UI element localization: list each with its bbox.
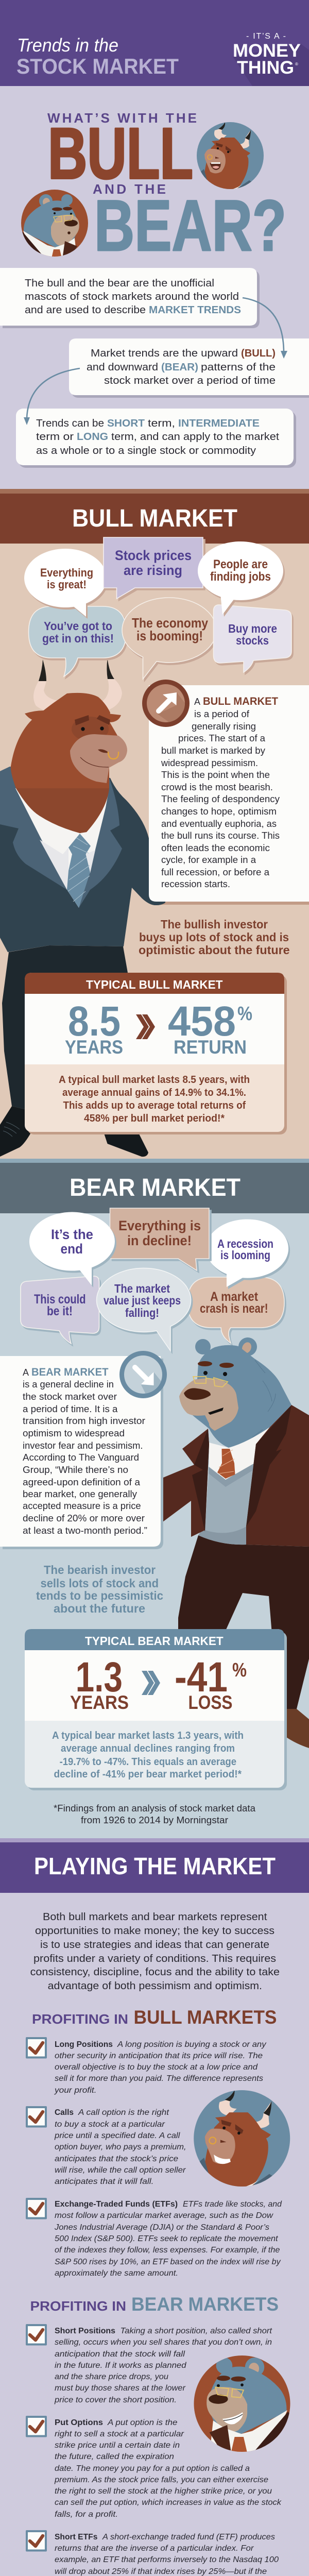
strategy: short positions: selling, occurs when you sell shares that you don’t own, in — [55, 2338, 272, 2347]
stat: 458 percent return: RETURN — [174, 1037, 247, 1058]
strategy: put options: the future, called the expiration — [55, 2452, 174, 2461]
text panel: bull market definition: prices. The start of a — [178, 733, 266, 743]
speech bubble: the economy is booming: The economy — [132, 615, 208, 631]
text panel: bear market definition: transition from high investor — [23, 1416, 145, 1426]
speech bubble: the economy is booming: is booming! — [136, 628, 203, 643]
strategy: put options: Put Options — [55, 2418, 103, 2427]
heading: profiting in bull markets: PROFITING IN — [32, 2011, 128, 2027]
speech bubble: it's the end: It’s the — [51, 1227, 93, 1242]
text panel: bull market definition: BULL MARKET — [203, 696, 278, 707]
strategy: put options: falls, for a profit. — [55, 2510, 118, 2519]
text box: market trends definition: stock market over a period of time — [104, 375, 276, 386]
bull market heading band: BULL MARKET — [72, 505, 237, 532]
strategy: calls: to buy a stock at a particular — [55, 2120, 165, 2129]
speech bubble: the economy is booming — [122, 598, 216, 679]
icon: checkbox short etfs — [26, 2530, 47, 2551]
text box: market trends definition: Market trends are the upward — [91, 348, 238, 359]
strategy: short positions: must buy those shares at the lower — [55, 2384, 186, 2393]
intro paragraph — [30, 1911, 280, 1992]
card description — [59, 1074, 250, 1124]
intro paragraph: opportunities to make money; the key to success — [35, 1925, 274, 1937]
strategy: long positions: Long Positions — [55, 2040, 113, 2049]
arrow: double chevron — [136, 1014, 155, 1039]
speech bubble: people are finding jobs: People are — [213, 557, 268, 571]
speech bubble: this could be it: This could — [34, 1292, 85, 1307]
strategy: calls: anticipates that the stock’s price — [55, 2155, 178, 2163]
text panel: bull market definition: bull market is marked by — [161, 745, 265, 756]
text box: market trends definition: patterns of the — [201, 362, 276, 373]
speech bubble: stock prices are rising — [104, 537, 203, 599]
text panel: bull market definition: is a period of — [194, 709, 250, 719]
logo: it's a money thing — [233, 32, 301, 78]
stat: 8.5 years: 8.5 — [68, 998, 121, 1045]
heading: profiting in bull markets: BULL MARKETS — [134, 2007, 277, 2028]
icon: checkbox long positions — [26, 2037, 47, 2059]
speech bubble: a market crash is near: A market — [210, 1290, 259, 1304]
card: typical bull market: TYPICAL BULL MARKET — [86, 978, 222, 991]
heading: profiting in bear markets — [30, 2294, 279, 2315]
strategy: put options: premium. As the stock price falls, you can either exercise — [54, 2476, 268, 2484]
text panel: bull market definition: The feeling of despondency — [161, 794, 280, 804]
text box: what the mascots are — [0, 268, 257, 326]
figure: bull in suit — [0, 658, 165, 1157]
playing the market heading band — [0, 1838, 309, 1893]
text panel: bull market definition: widespread pessimism. — [161, 758, 258, 768]
text panel: bull market definition: changes to hope, optimism — [161, 806, 277, 817]
speech bubble: people are finding jobs — [198, 541, 283, 615]
panel: bull market background — [0, 544, 309, 1159]
stat: minus 41 percent loss: % — [232, 1659, 247, 1681]
card description — [52, 1730, 244, 1780]
text panel: bull market definition: crowd is the most bearish. — [161, 782, 273, 792]
icon: rising arrow — [142, 680, 190, 727]
text panel: bear market definition: optimism to widespread — [23, 1428, 125, 1438]
logo: it's a money thing: - IT’S A - — [246, 32, 286, 41]
main title: AND THE — [93, 181, 166, 197]
strategy: calls: anticipates that it will fall. — [55, 2177, 153, 2186]
speech bubble: stock prices are rising: are rising — [124, 563, 182, 578]
stat: 1.3 years: 1.3 — [76, 1654, 123, 1701]
text panel: bear market definition: is a general decline in — [23, 1379, 114, 1389]
speech bubble: people are finding jobs: finding jobs — [210, 570, 271, 584]
card description: average annual declines ranging from — [61, 1743, 235, 1754]
strategy: long positions — [54, 2040, 267, 2095]
text panel: bull market definition: cycle, for example in a — [161, 855, 256, 865]
strategy: short etfs: returns that are the inverse of a particular index. For — [55, 2544, 254, 2553]
intro paragraph: advantage of both pessimism and optimism. — [48, 1980, 262, 1992]
strategy: short etfs: Short ETFs — [55, 2533, 97, 2541]
text box: market trends definition: (BULL) — [241, 348, 276, 359]
card description: This adds up to average total returns of — [63, 1100, 246, 1111]
main title: BULL — [48, 113, 193, 194]
speech bubble: a market crash is near: crash is near! — [200, 1301, 268, 1316]
text panel: bear market definition: the stock market over — [23, 1392, 117, 1402]
icon: checkbox short positions — [26, 2324, 47, 2345]
card description: 458% per bull market period!* — [84, 1113, 225, 1124]
strategy: put options: the right to sell the stock at the higher strike price, or you — [55, 2487, 272, 2496]
card description: average annual gains of 14.9% to 34.1%. — [62, 1087, 246, 1098]
arrow: double chevron — [142, 1671, 160, 1695]
callout: the bearish investor: sells lots of stock and — [40, 1577, 159, 1590]
speech bubble: everything is in decline: in decline! — [127, 1233, 192, 1248]
text box: market trends definition: (BEAR) — [161, 362, 198, 373]
text panel: bull market definition: This is the point when the — [161, 770, 270, 780]
text panel: bear market definition: According to The Vanguard — [23, 1452, 139, 1463]
callout: the bearish investor — [36, 1563, 163, 1615]
bull market heading band — [0, 489, 309, 544]
icon: checkbox calls — [26, 2106, 47, 2128]
speech bubble: buy more stocks: stocks — [236, 634, 269, 647]
card description: decline of -41% per bear market period!* — [54, 1769, 242, 1780]
text box: what the mascots are: mascots of stock markets around the world — [25, 291, 239, 302]
text box: trend lengths: Trends can be — [36, 418, 104, 429]
speech bubble: buy more stocks — [213, 605, 291, 672]
header band — [0, 0, 309, 86]
arrow: intro two to three — [24, 368, 80, 425]
card: typical bear market: TYPICAL BEAR MARKET — [85, 1634, 224, 1648]
speech bubble: stock prices are rising: Stock prices — [115, 548, 192, 563]
heading: profiting in bull markets — [32, 2007, 277, 2028]
text panel: bear market definition: BEAR MARKET — [31, 1366, 109, 1378]
footnote — [54, 1803, 256, 1825]
speech bubble: this could be it — [21, 1276, 99, 1344]
speech bubble: everything is great — [24, 549, 107, 617]
intro paragraph: profits under a variety of conditions. This requires — [33, 1953, 276, 1964]
card description: A typical bear market lasts 1.3 years, with — [52, 1730, 244, 1741]
speech bubble: it's the end — [29, 1212, 115, 1285]
strategy: exchange-traded funds: of the indexes they follow, less expenses. For example, if the — [55, 2246, 280, 2255]
callout: the bullish investor — [139, 918, 290, 957]
header title — [16, 35, 179, 78]
text panel: bear market definition: agreed-upon definition of a — [23, 1477, 141, 1487]
strategy: short etfs: A short-exchange traded fund (ETF) produces — [102, 2533, 275, 2541]
text panel: bull market definition: A — [194, 697, 200, 707]
strategy: put options: date. The money you pay for a put option is called a — [55, 2464, 250, 2473]
text box: market trends definition: and downward — [87, 362, 158, 373]
speech bubble: everything is great: Everything — [40, 566, 93, 579]
text panel: bear market definition: A — [23, 1367, 29, 1378]
bear market heading band: BEAR MARKET — [70, 1174, 241, 1201]
stat: 1.3 years — [70, 1654, 129, 1713]
main title — [47, 110, 286, 266]
heading: profiting in bear markets: BEAR MARKETS — [131, 2294, 279, 2315]
strategy: short etfs: example, an ETF that performs inversely to the Nasdaq 100 — [55, 2555, 279, 2564]
text panel: bull market definition: recession starts. — [161, 879, 230, 889]
text box: market trends definition — [69, 338, 309, 395]
strategy: short etfs: will drop about 25% if that index rises by 25%—but if the — [55, 2567, 267, 2576]
strategy: long positions: A long position is buying a stock or any — [117, 2040, 267, 2049]
callout: the bullish investor: buys up lots of stock and is — [139, 930, 289, 944]
text box: trend lengths — [16, 409, 294, 465]
speech bubble: this could be it: be it! — [47, 1304, 73, 1318]
text panel: bear market definition — [0, 1356, 161, 1547]
icon: grinning bear portrait — [194, 2355, 290, 2452]
text panel: bear market definition: Group, “While there’s no — [23, 1465, 128, 1475]
intro paragraph: is to use strategies and ideas that can generate — [40, 1939, 269, 1951]
speech bubble: the market value keeps falling: The market — [114, 1282, 170, 1295]
strategy: short etfs — [55, 2533, 281, 2576]
text panel: bear market definition: accepted measure is a price — [23, 1501, 141, 1511]
text box: trend lengths: INTERMEDIATE — [178, 418, 260, 429]
speech bubble: everything is in decline: Everything is — [118, 1218, 201, 1233]
speech bubble: you've got to get in on this: You’ve got to — [44, 619, 112, 633]
text box: trend lengths: LONG — [77, 431, 108, 443]
main title: WHAT’S WITH THE — [47, 110, 197, 126]
footnote: from 1926 to 2014 by Morningstar — [81, 1815, 228, 1825]
strategy: put options: right to sell a stock at a particular — [55, 2430, 184, 2438]
strategy: short positions: Short Positions — [55, 2327, 115, 2335]
footnote: *Findings from an analysis of stock market data — [54, 1803, 256, 1814]
strategy: exchange-traded funds: 500 Index (S&P 500). ETFs seek to replicate the movement — [55, 2234, 278, 2243]
stat: 458 percent return: 458 — [168, 998, 236, 1045]
text box: trend lengths: SHORT — [107, 418, 145, 429]
text panel: bull market definition: the bull runs its course. This — [161, 831, 280, 841]
callout: the bullish investor: optimistic about the future — [139, 943, 290, 957]
text box: trend lengths: term or — [36, 431, 74, 443]
stat: minus 41 percent loss: -41 — [175, 1654, 228, 1701]
playing the market heading band: PLAYING THE MARKET — [34, 1853, 276, 1879]
stat: minus 41 percent loss: LOSS — [188, 1692, 233, 1713]
icon: bear portrait — [21, 190, 88, 257]
speech bubble: everything is in decline — [110, 1208, 209, 1270]
speech bubble: buy more stocks: Buy more — [228, 622, 277, 635]
card description: A typical bull market lasts 8.5 years, with — [59, 1074, 250, 1086]
icon: falling arrow — [119, 1351, 167, 1401]
figure: bear in suit — [161, 1337, 309, 1748]
text panel: bull market definition: full recession, or before a — [161, 867, 270, 877]
strategy: exchange-traded funds: most follow a particular market average, such as the Dow — [55, 2211, 273, 2220]
callout: the bearish investor: tends to be pessimistic — [36, 1589, 163, 1602]
callout: the bullish investor: The bullish investor — [161, 918, 268, 931]
stat: 458 percent return — [168, 998, 252, 1058]
speech bubble: a recession is looming: A recession — [217, 1237, 273, 1250]
strategy: put options: A put option is the — [107, 2418, 177, 2427]
text box: what the mascots are: The bull and the bear are the unofficial — [25, 278, 214, 289]
text panel: bull market definition: often leads the economic — [161, 843, 270, 853]
speech bubble: it's the end: end — [61, 1241, 83, 1257]
strategy: exchange-traded funds: approximately the same amount. — [55, 2269, 178, 2278]
icon: checkbox etfs — [26, 2198, 47, 2219]
speech bubble: the market value keeps falling — [97, 1268, 191, 1351]
strategy: exchange-traded funds — [54, 2200, 282, 2278]
strategy: short positions: in the future. If it works as planned — [55, 2361, 187, 2370]
text panel: bear market definition: bear market, one generally — [23, 1489, 137, 1499]
panel: bear market background — [0, 1213, 309, 1838]
text box: trend lengths: as a whole or to a single stock or commodity — [36, 445, 256, 456]
speech bubble: you've got to get in on this — [29, 606, 126, 676]
stat: 8.5 years: YEARS — [65, 1037, 123, 1058]
stat: minus 41 percent loss — [175, 1654, 247, 1713]
speech bubble: the market value keeps falling: value just keeps — [104, 1294, 181, 1307]
text box: trend lengths: term, — [148, 418, 175, 429]
text box: what the mascots are: MARKET TRENDS — [149, 304, 241, 316]
header title: STOCK MARKET — [16, 54, 179, 78]
icon: checkbox put options — [26, 2416, 47, 2437]
bear market heading band — [0, 1159, 309, 1213]
strategy: long positions: your profit. — [54, 2086, 97, 2095]
heading: profiting in bear markets: PROFITING IN — [30, 2298, 126, 2314]
card description: -19.7% to -47%. This equals an average — [60, 1756, 236, 1768]
speech bubble: a recession is looming — [206, 1219, 288, 1287]
logo: it's a money thing: ® — [295, 62, 298, 66]
text box: what the mascots are: and are used to describe — [25, 304, 146, 316]
icon: bull portrait — [197, 122, 264, 196]
intro paragraph: consistency, discipline, focus and the ability to take — [30, 1967, 280, 1978]
speech bubble: a market crash is near — [187, 1277, 284, 1343]
card: typical bear market — [25, 1629, 284, 1788]
text panel: bull market definition: and eventually euphoria, as — [161, 819, 277, 829]
stat: 458 percent return: % — [237, 1003, 252, 1025]
speech bubble: the market value keeps falling: falling! — [125, 1306, 159, 1319]
strategy: calls: A call option is the right — [78, 2108, 169, 2117]
strategy: long positions: overall objective is to buy the stock at a low price and — [55, 2063, 258, 2072]
strategy: exchange-traded funds: S&P 500 rises by 10%, an ETF based on the index will rise by — [55, 2258, 281, 2266]
speech bubble: you've got to get in on this: get in on this! — [42, 632, 114, 645]
text panel: bear market definition: at least a two-month period.” — [23, 1526, 147, 1536]
text panel: bear market definition: a period of time. It is a — [23, 1404, 118, 1414]
strategy: put options: strike price until a certain date in — [55, 2441, 180, 2450]
strategy: calls: option buyer, who pays a premium, — [55, 2143, 186, 2151]
strategy: calls: price until a specified date. A call — [54, 2131, 180, 2140]
logo: it's a money thing: THING — [237, 58, 294, 78]
strategy: long positions: sell it for more than you paid. The difference represents — [55, 2074, 263, 2083]
strategy: short positions — [54, 2327, 272, 2404]
speech bubble: everything is great: is great! — [47, 578, 87, 591]
strategy: short positions: anticipation that the stock will fall — [55, 2350, 185, 2359]
callout: the bearish investor: about the future — [54, 1602, 145, 1615]
speech bubble: a recession is looming: is looming — [220, 1248, 270, 1262]
intro paragraph: Both bull markets and bear markets represent — [43, 1911, 267, 1923]
strategy: long positions: other security in anticipation that its price will rise. The — [55, 2052, 263, 2060]
text panel: bull market definition — [142, 685, 309, 905]
strategy: calls — [54, 2108, 186, 2186]
text panel: bear market definition: decline of 20% or more over — [23, 1513, 145, 1523]
strategy: exchange-traded funds: ETFs trade like stocks, and — [183, 2200, 282, 2209]
text panel: bear market definition: investor fear and pessimism. — [23, 1440, 143, 1451]
stat: 1.3 years: YEARS — [70, 1692, 129, 1713]
callout: the bearish investor: The bearish investor — [44, 1563, 156, 1577]
strategy: short positions: price to cover the short position. — [54, 2396, 177, 2404]
strategy: short positions: and the share price drops, you — [55, 2372, 168, 2381]
header title: Trends in the — [17, 35, 118, 56]
text panel: bull market definition: generally rising — [192, 721, 256, 732]
strategy: short positions: Taking a short position, also called short — [121, 2327, 272, 2335]
strategy: exchange-traded funds: Exchange-Traded Funds (ETFs) — [55, 2200, 178, 2209]
icon: grinning bull portrait — [194, 2090, 290, 2196]
card: typical bull market — [25, 973, 284, 1132]
strategy: put options: can sell the put option, which increases in value as the stock — [55, 2498, 282, 2507]
strategy: calls: Calls — [55, 2108, 74, 2117]
arrow: intro one to two — [243, 298, 287, 359]
text box: trend lengths: term, and can apply to the market — [111, 431, 279, 443]
strategy: put options — [54, 2418, 282, 2519]
logo: it's a money thing: MONEY — [233, 41, 301, 61]
strategy: calls: will rise, while the call option seller — [55, 2166, 186, 2175]
strategy: exchange-traded funds: Jones Industrial Average (DJIA) or the Standard & Poor’s — [54, 2223, 269, 2232]
